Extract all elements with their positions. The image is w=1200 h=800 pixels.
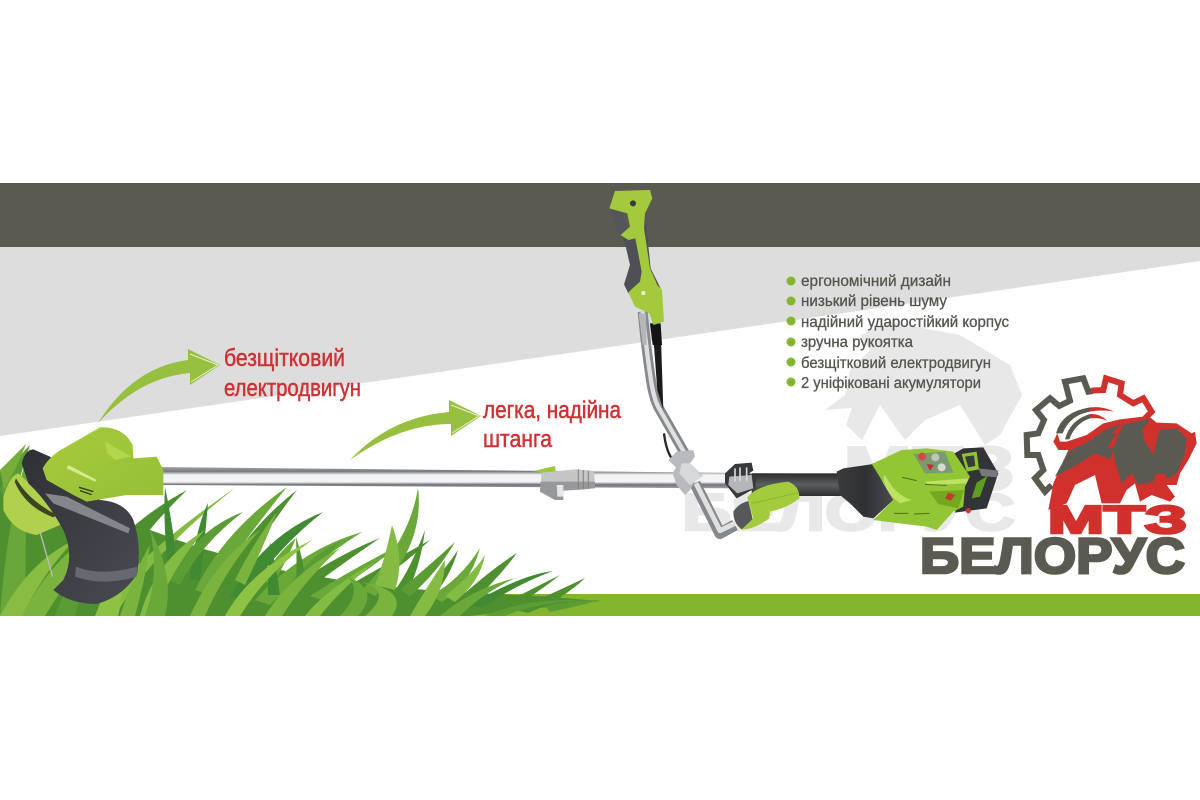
upper handle <box>609 190 664 345</box>
grass <box>0 444 600 616</box>
guard <box>22 449 139 604</box>
label: motor: безщітковий <box>224 345 345 372</box>
footer green band <box>0 594 1200 616</box>
arrow: to motor <box>98 349 220 423</box>
feature list: 2 уніфіковані акумулятори <box>801 375 981 392</box>
label: shaft: штанга <box>483 426 553 453</box>
background: grey diagonal panel <box>0 246 1200 436</box>
label: motor: електродвигун <box>224 375 361 402</box>
arrow: to shaft <box>350 400 481 460</box>
clamp body <box>668 450 703 495</box>
watermark logo: БЕЛОРУС <box>682 484 1015 542</box>
lower tube <box>695 483 735 533</box>
body <box>872 448 970 530</box>
shaft coupler and small green tab <box>533 466 595 500</box>
control panel <box>913 452 953 473</box>
hood <box>43 427 163 502</box>
cutting line <box>39 529 53 577</box>
watermark logo <box>682 322 1022 542</box>
gear and bison <box>1027 378 1197 510</box>
trimmer head <box>3 427 163 604</box>
spool <box>3 473 62 535</box>
trimmer shaft <box>160 467 850 489</box>
dark tube <box>752 473 845 496</box>
collar <box>837 464 893 518</box>
logo text: Belarus: БЕЛОРУС <box>920 528 1185 584</box>
clamp, lower tube and side grip <box>668 450 845 533</box>
feature list: безщітковий електродвигун <box>801 355 991 372</box>
watermark logo: МТЗ <box>843 435 1015 504</box>
label: motor <box>224 345 361 402</box>
header band <box>0 183 1200 247</box>
loop handle tube <box>643 312 687 458</box>
feature list: низький рівень шуму <box>801 293 947 310</box>
feature list: ергономічний дизайн <box>801 273 951 290</box>
logo text: MTZ: МТЗ <box>1048 499 1187 542</box>
battery <box>953 447 998 513</box>
knob clip <box>725 463 757 498</box>
motor and battery <box>837 447 998 530</box>
feature list: надійний ударостійкий корпус <box>801 314 1009 331</box>
side grip <box>733 501 753 529</box>
feature list: зручна рукоятка <box>801 334 913 351</box>
feature list <box>786 273 1009 392</box>
logo: MTZ Belarus <box>920 378 1197 584</box>
label: shaft: легка, надійна <box>483 397 622 424</box>
label: shaft <box>483 397 622 453</box>
